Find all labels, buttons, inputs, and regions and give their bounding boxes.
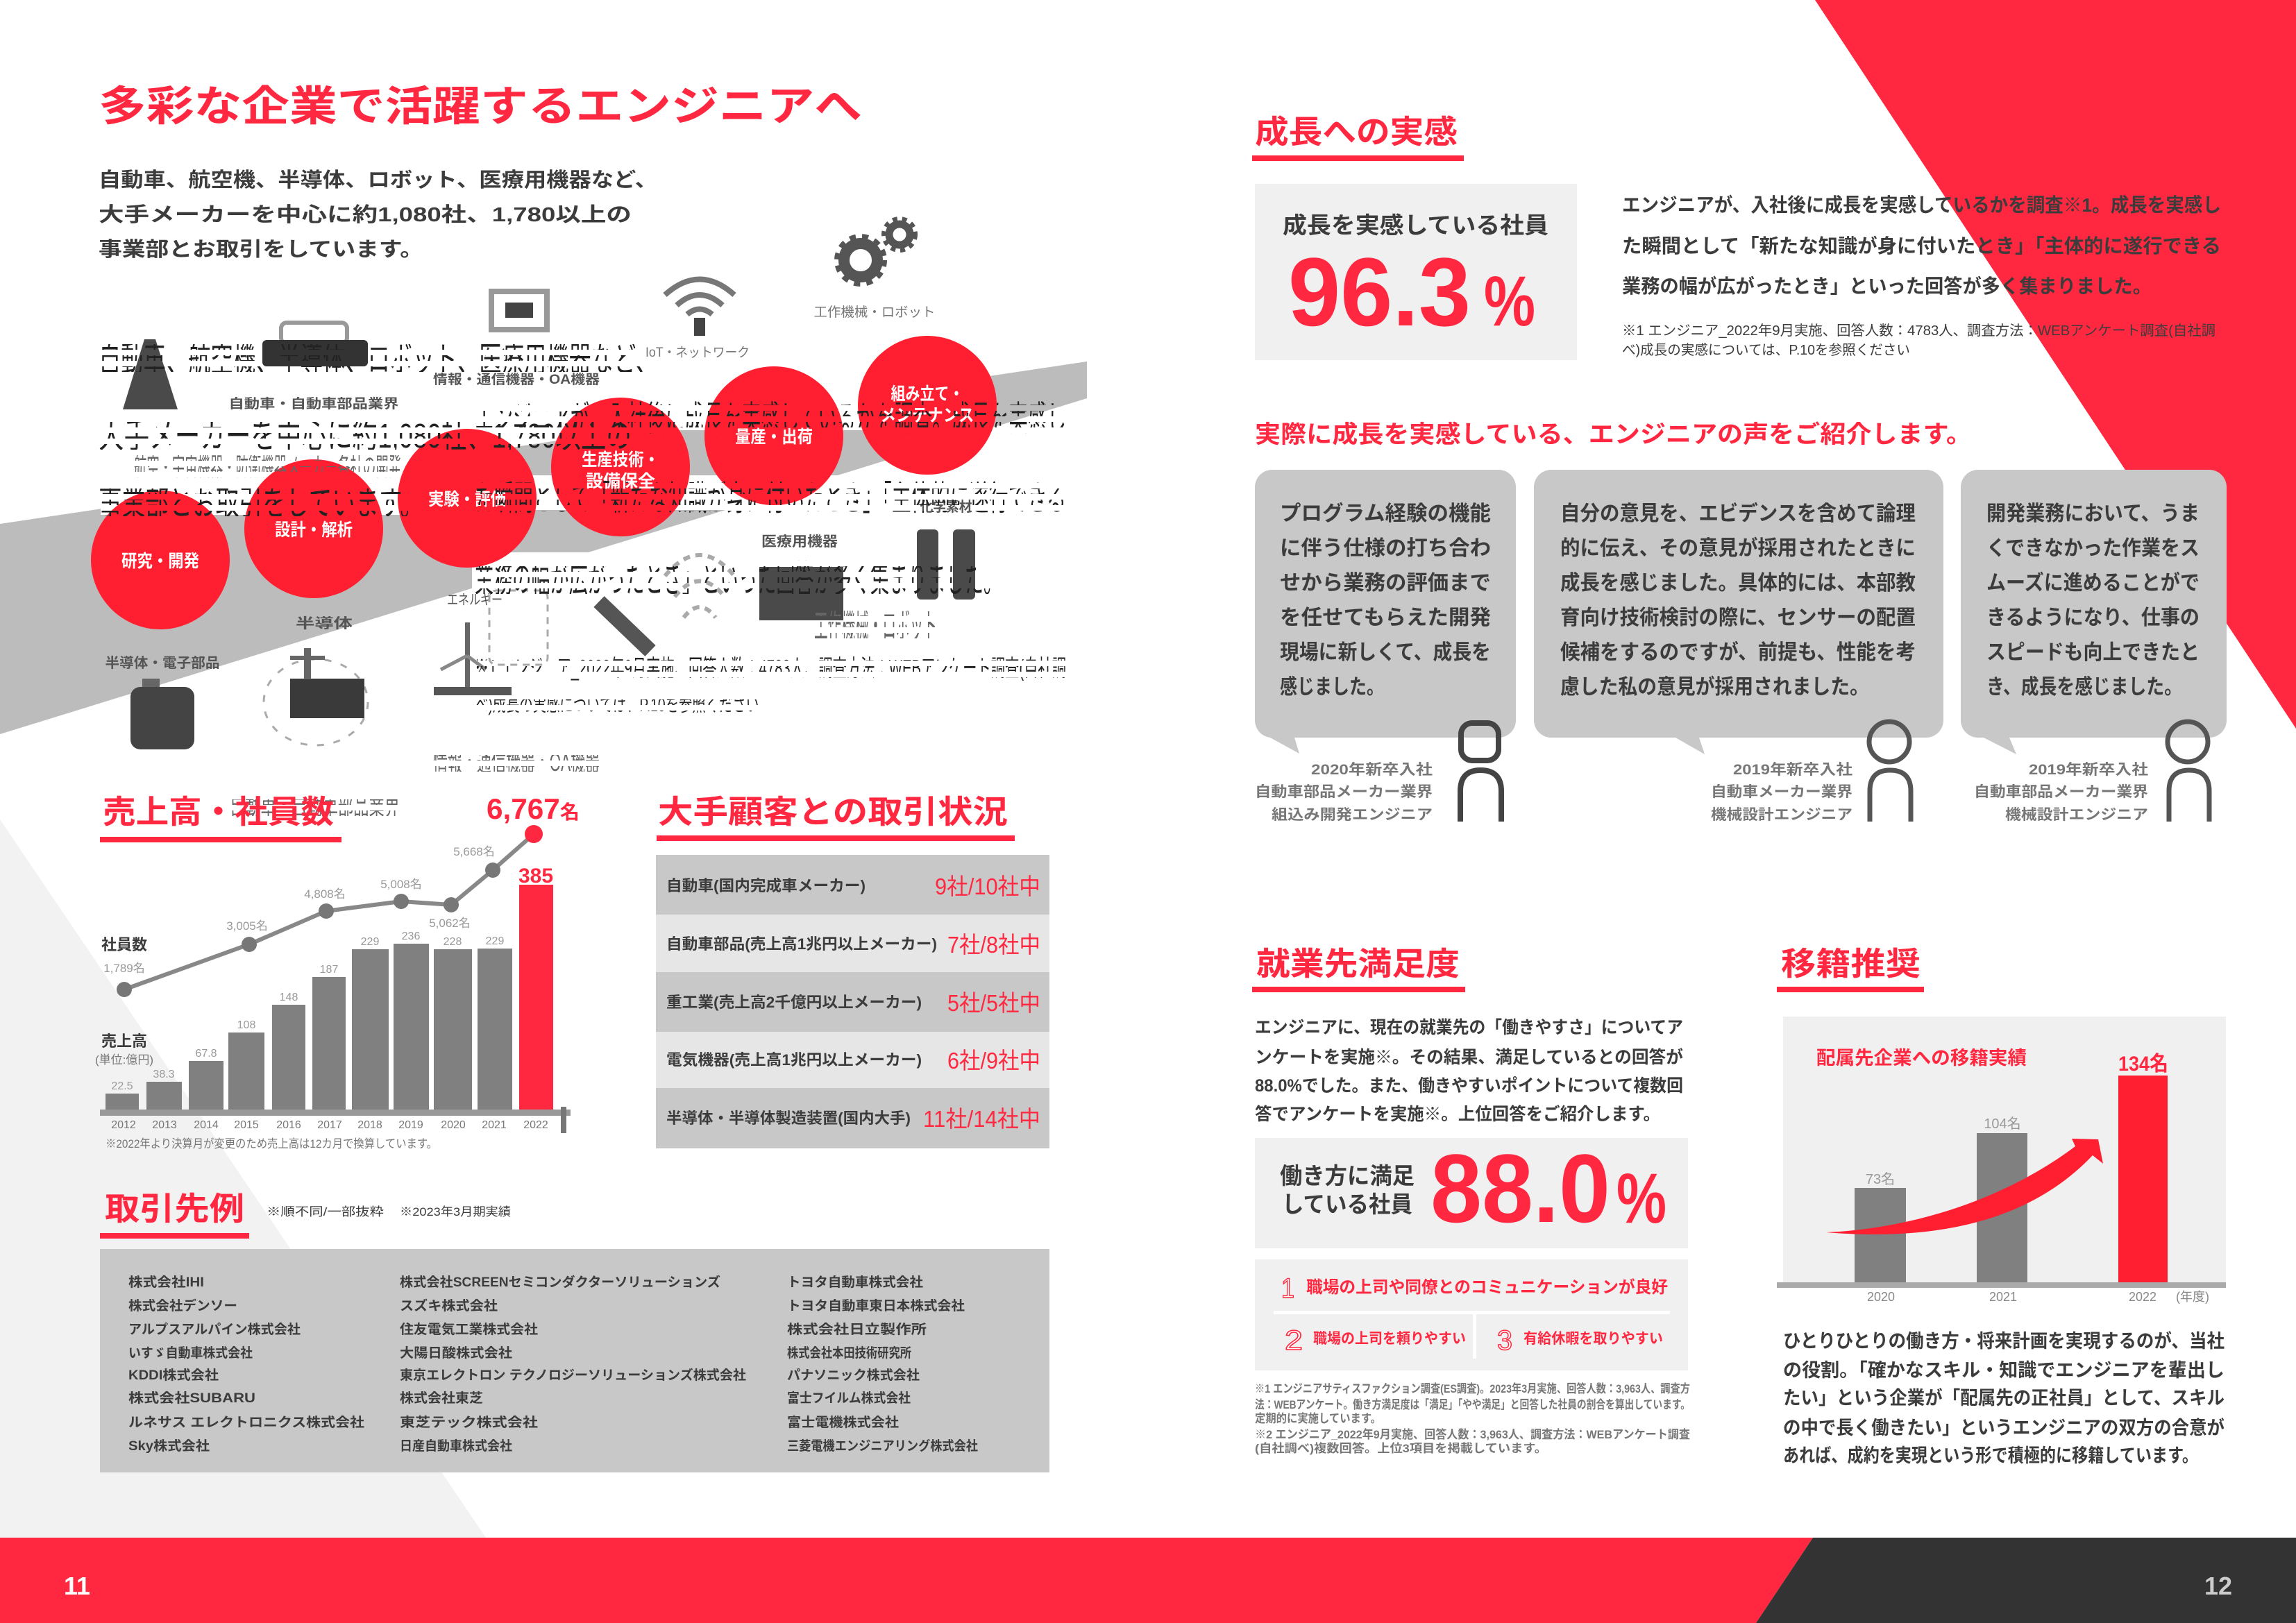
row 4: 電気機器(売上高1兆円以上メーカー)	[666, 1051, 922, 1069]
column 3: トヨタ自動車株式会社	[787, 1275, 923, 1290]
bubble	[1961, 470, 2227, 754]
value: latest employees: 6,767名	[487, 792, 580, 825]
heading: engineer voices: 実際に成長を実感している、エンジニアの声をご紹介します。	[1255, 421, 1972, 448]
step: assembly: メンテナンス	[880, 406, 974, 425]
panel: growth statistic	[1255, 184, 1577, 360]
reason 3: 有給休暇を取りやすい	[1523, 1331, 1663, 1347]
footer: dark band	[1756, 1538, 2296, 1623]
column 3: 三菱電機エンジニアリング株式会社	[787, 1438, 978, 1454]
reason 2: 2	[1285, 1325, 1303, 1356]
ghost overlay text: 自動車・自動車部品業界	[230, 793, 400, 820]
reason 1: 職場の上司や同僚とのコミュニケーションが良好	[1306, 1277, 1668, 1297]
line value labels: 5,668名	[453, 845, 495, 858]
page number 12: 12	[2204, 1572, 2232, 1600]
line value labels	[103, 845, 495, 975]
panel: satisfaction statistic	[1255, 1134, 1688, 1248]
label: machine tools: 工作機械・ロボット	[813, 305, 936, 320]
satisfaction footnotes: 法：WEBアンケート。働き方満足度は「満足」「やや満足」と回答した社員の割合を算出しています。	[1255, 1397, 1690, 1411]
table: major customers	[656, 855, 1049, 1148]
caption: 組込み開発エンジニア	[1272, 807, 1433, 823]
column 1: 株式会社デンソー	[128, 1298, 237, 1314]
row 4: 6社/9社中	[947, 1048, 1040, 1073]
row 5: 半導体・半導体製造装置(国内大手)	[666, 1110, 911, 1127]
voice 1	[1255, 470, 1516, 823]
column 1: KDDI株式会社	[128, 1368, 219, 1383]
line value labels: 4,808名	[304, 887, 346, 901]
ghost overlay text: 航空・宇宙機器・防衛機器メーカー各社の開発	[134, 453, 401, 482]
bar value labels: 108	[237, 1019, 255, 1031]
intro text: 事業部とお取引をしています。	[99, 238, 423, 261]
intro text	[99, 169, 657, 261]
person	[1460, 723, 1501, 822]
bar value labels: 187	[320, 964, 338, 976]
year labels: 2018	[357, 1119, 382, 1131]
label: information devices: 情報・通信機器・OA機器	[433, 372, 600, 387]
year labels: 2016	[276, 1119, 301, 1131]
transfer description: あれば、成約を実現という形で積極的に移籍しています。	[1783, 1445, 2198, 1466]
ghost overlay text: べ)成長の実感については、P.10を参照ください	[475, 695, 759, 716]
bar value labels: 148	[280, 992, 298, 1003]
value: latest sales: 385	[518, 865, 553, 887]
title: 多彩な企業で活躍するエンジニアへ	[99, 83, 862, 130]
axis	[1777, 1282, 2226, 1288]
growth description: 業務の幅が広がったとき」といった回答が多く集まりました。	[1622, 275, 2152, 297]
step: mass production: 量産・出荷	[735, 427, 813, 447]
bar 1	[1855, 1188, 1906, 1282]
client note 2: ※2023年3月期実績	[400, 1205, 511, 1218]
panel: top reasons	[1255, 1259, 1688, 1370]
quote: スピードも向上できたと	[1986, 641, 2200, 664]
label: medical: 医療用機器	[761, 534, 838, 550]
step: production engineering	[551, 398, 690, 536]
label: automobile: 自動車・自動車部品業界	[229, 396, 398, 411]
person	[1869, 722, 1911, 822]
icon: gears	[837, 219, 915, 284]
icon: monitor	[491, 291, 547, 330]
caption	[1974, 762, 2148, 823]
bar value labels: 228	[444, 936, 462, 948]
icon: device block	[130, 679, 194, 749]
column 1: 株式会社IHI	[128, 1275, 204, 1290]
column 1: アルプスアルパイン株式会社	[128, 1322, 301, 1337]
row 4	[656, 1032, 1049, 1088]
heading: sales and employees: 売上高・社員数	[103, 794, 334, 830]
bar value labels: 229	[486, 935, 504, 947]
bar value labels: 67.8	[195, 1048, 217, 1060]
quote: ムーズに進めることがで	[1986, 571, 2200, 595]
reason 2: 職場の上司を頼りやすい	[1313, 1331, 1466, 1347]
reason 1: 1	[1281, 1273, 1294, 1304]
icon: tower	[123, 339, 178, 409]
column 1: Sky株式会社	[128, 1438, 210, 1454]
ghost overlay text: 自動車、航空機、半導体、ロボット、医療用機器など、	[99, 341, 657, 379]
bar: latest sales	[519, 885, 553, 1110]
caption: 2019年新卒入社	[2029, 762, 2148, 778]
heading: sense of growth	[1252, 114, 1464, 161]
growth footnote: ※1 エンジニア_2022年9月実施、回答人数：4783人、調査方法：WEBアンケート調査(自社調	[1622, 323, 2215, 339]
quote: 的に伝え、その意見が採用されたときに	[1560, 536, 1916, 560]
line: employees	[124, 834, 534, 989]
label: chemicals: 化学素材	[920, 499, 972, 515]
heading: transfer recommendation	[1777, 946, 1924, 992]
step: test	[398, 429, 537, 568]
bar value 1: 73名	[1866, 1171, 1895, 1187]
chart note: ※2022年より決算月が変更のため売上高は12カ月で換算しています。	[105, 1137, 437, 1150]
arrow: upward trend	[1826, 1139, 2103, 1234]
label: network: IoT・ネットワーク	[645, 345, 750, 360]
quote: を任せてもらえた開発	[1280, 606, 1491, 629]
page number 11: 11	[64, 1572, 90, 1600]
quote	[1280, 502, 1491, 699]
bars: sales	[105, 944, 512, 1110]
ghost overlay text: 事業部とお取引をしています。	[99, 484, 423, 522]
satisfaction footnotes: ※2 エンジニア_2022年9月実施、回答人数：3,963人、調査方法：WEBアンケート調査	[1255, 1427, 1690, 1441]
icon: robot arm	[599, 602, 650, 651]
year labels: 2017	[317, 1119, 342, 1131]
transfer description: の役割。「確かなスキル・知識でエンジニアを輩出し	[1783, 1360, 2225, 1381]
client note 1: ※順不同/一部抜粋	[267, 1205, 384, 1218]
axis unit	[561, 1107, 566, 1133]
panel: client list	[100, 1249, 1049, 1472]
icon: wifi	[665, 279, 734, 336]
column 2: 株式会社SCREENセミコンダクターソリューションズ	[400, 1274, 720, 1290]
heading: workplace satisfaction	[1252, 946, 1465, 992]
label: employees: 社員数	[101, 936, 147, 953]
heading: client examples	[100, 1191, 249, 1239]
quote: 感じました。	[1280, 676, 1384, 699]
label: sales: 売上高	[101, 1033, 147, 1050]
ghost overlay text: 業務の幅が広がったとき」といった回答が多く集まりました。	[475, 560, 1002, 600]
column 1: ルネサス エレクトロニクス株式会社	[128, 1415, 364, 1430]
chart title: 配属先企業への移籍実績	[1816, 1048, 2027, 1069]
x labels	[1867, 1290, 2209, 1304]
row 3: 重工業(売上高2千億円以上メーカー)	[666, 994, 922, 1011]
row 3	[656, 972, 1049, 1032]
quote: 現場に新しくて、成長を	[1280, 641, 1491, 664]
bar value labels: 236	[402, 931, 420, 942]
year labels: 2020	[441, 1119, 466, 1131]
column 2: 住友電気工業株式会社	[400, 1322, 538, 1337]
ghost overlay text: 情報・通信機器・OA機器	[433, 749, 600, 777]
caption: 2020年新卒入社	[1311, 762, 1433, 778]
label: sales unit: (単位:億円)	[95, 1053, 153, 1067]
step: design	[244, 459, 383, 598]
panel: growth statistic: 成長を実感している社員	[1283, 212, 1548, 238]
bar value labels: 38.3	[153, 1069, 175, 1080]
column 3: 株式会社日立製作所	[787, 1322, 927, 1337]
caption: 機械設計エンジニア	[1711, 807, 1852, 823]
column 2: スズキ株式会社	[400, 1298, 498, 1314]
satisfaction footnotes: ※1 エンジニアサティスファクション調査(ES調査)。2023年3月実施、回答人数：3,963人、調査方	[1255, 1382, 1690, 1395]
reason 2	[1285, 1325, 1466, 1356]
person	[2168, 722, 2209, 822]
bar value 3: 134名	[2118, 1053, 2168, 1076]
column 2: 東芝テック株式会社	[400, 1415, 538, 1430]
heading: transfer recommendation: 移籍推奨	[1781, 946, 1921, 982]
column 3: トヨタ自動車東日本株式会社	[787, 1298, 965, 1314]
satisfaction footnotes	[1255, 1382, 1690, 1455]
footer: red band	[0, 1538, 1813, 1623]
panel: satisfaction statistic: している社員	[1282, 1191, 1412, 1217]
heading: client examples: 取引先例	[105, 1191, 244, 1227]
step: test: 実験・評価	[428, 490, 506, 509]
x labels: (年度)	[2176, 1290, 2209, 1304]
quote: き、成長を感じました。	[1986, 676, 2182, 699]
bar value labels: 22.5	[111, 1080, 133, 1092]
transfer description	[1783, 1330, 2225, 1466]
line value labels: 1,789名	[103, 962, 145, 975]
caption: 自動車部品メーカー業界	[1974, 784, 2148, 800]
panel: growth statistic: %	[1484, 262, 1535, 341]
column 2	[400, 1274, 746, 1454]
row 1: 自動車(国内完成車メーカー)	[666, 877, 866, 894]
ghost overlay text: た瞬間として「新たな知識が身に付いたとき」「主体的に遂行できる	[475, 479, 1066, 518]
growth description: エンジニアが、入社後に成長を実感しているかを調査※1。成長を実感し	[1622, 194, 2221, 216]
heading: major customers: 大手顧客との取引状況	[658, 794, 1008, 830]
column 2: 大陽日酸株式会社	[400, 1345, 512, 1361]
ghost overlay text: 工作機械・ロボット	[814, 608, 937, 647]
step: production engineering: 生産技術・	[582, 450, 659, 470]
x labels: 2022	[2129, 1290, 2156, 1304]
ghost overlay text: ※1 エンジニア_2022年9月実施、回答人数：4783人、調査方法：WEBアンケート調査(自社調	[475, 656, 1066, 681]
transfer description: ひとりひとりの働き方・将来計画を実現するのが、当社	[1783, 1330, 2225, 1352]
quote: プログラム経験の機能	[1280, 502, 1491, 525]
chart: sales bars and employee line	[95, 792, 580, 1150]
ghost overlay text	[99, 341, 1066, 820]
step: assembly	[858, 336, 997, 475]
panel: growth statistic: 96.3	[1288, 237, 1471, 346]
process circles	[91, 336, 997, 629]
satisfaction footnotes: (自社調べ)複数回答。上位3項目を掲載しています。	[1255, 1441, 1547, 1455]
column 2: 日産自動車株式会社	[400, 1438, 512, 1454]
column 2: 東京エレクトロン テクノロジーソリューションズ株式会社	[400, 1367, 746, 1383]
background: red corner	[1815, 0, 2296, 729]
satisfaction description: エンジニアに、現在の就業先の「働きやすさ」についてア	[1255, 1018, 1683, 1037]
row 1: 9社/10社中	[935, 874, 1040, 899]
intro text: 自動車、航空機、半導体、ロボット、医療用機器など、	[99, 169, 657, 192]
quote: 開発業務において、うま	[1986, 502, 2200, 525]
latest marker	[525, 825, 543, 843]
bubble	[1255, 470, 1516, 754]
background: light grey corner	[0, 819, 486, 1538]
bar value labels: 229	[361, 936, 379, 948]
background: grey process band	[0, 362, 1087, 734]
caption: 自動車部品メーカー業界	[1255, 784, 1433, 800]
quote: 慮した私の意見が採用されました。	[1560, 675, 1869, 699]
year labels: 2022	[523, 1119, 548, 1131]
label: semiconductor: 半導体	[296, 615, 353, 631]
step: mass production	[704, 366, 843, 505]
step: research: 研究・開発	[121, 552, 199, 571]
row 2: 自動車部品(売上高1兆円以上メーカー)	[666, 935, 937, 953]
column 1	[128, 1275, 364, 1454]
quote	[1560, 502, 1916, 699]
line value labels: 5,008名	[380, 878, 422, 891]
label: energy: エネルギー	[447, 592, 503, 608]
transfer description: の中で長く働きたい」というエンジニアの双方の合意が	[1783, 1417, 2225, 1438]
year labels: 2019	[398, 1119, 423, 1131]
reason 3	[1497, 1325, 1663, 1356]
satisfaction description: 88.0%でした。また、働きやすいポイントについて複数回	[1255, 1076, 1683, 1096]
process icons and labels	[105, 219, 975, 749]
caption: 2019年新卒入社	[1733, 762, 1852, 778]
bar 2	[1977, 1133, 2027, 1282]
heading: sense of growth: 成長への実感	[1255, 114, 1458, 150]
reason 3: 3	[1497, 1325, 1512, 1356]
growth description: た瞬間として「新たな知識が身に付いたとき」「主体的に遂行できる	[1622, 235, 2221, 257]
row 2	[656, 915, 1049, 972]
column 3: 富士電機株式会社	[787, 1415, 899, 1430]
panel: satisfaction statistic: %	[1617, 1159, 1666, 1238]
satisfaction description	[1255, 1018, 1683, 1124]
heading: workplace satisfaction: 就業先満足度	[1256, 946, 1460, 982]
row 3: 5社/5社中	[947, 990, 1040, 1016]
year labels: 2014	[194, 1119, 219, 1131]
x labels: 2020	[1867, 1290, 1895, 1304]
ghost overlay text: エンジニアが、入社後に成長を実感しているかを調査。成長を実感し	[475, 400, 1066, 438]
caption: 機械設計エンジニア	[2005, 807, 2148, 823]
satisfaction description: 答でアンケートを実施※。上位回答をご紹介します。	[1255, 1104, 1660, 1124]
bar value 2: 104名	[1984, 1116, 2021, 1132]
panel: satisfaction statistic: 88.0	[1430, 1134, 1610, 1243]
line value labels: 5,062名	[429, 917, 471, 930]
step: design: 設計・解析	[275, 520, 353, 540]
row 5: 11社/14社中	[923, 1106, 1040, 1132]
quote: 候補をするのですが、前提も、性能を考	[1560, 640, 1916, 664]
panel: satisfaction statistic: 働き方に満足	[1280, 1163, 1415, 1189]
heading: sales and employees	[100, 794, 341, 842]
row 2: 7社/8社中	[947, 932, 1040, 958]
transfer description: たい」という企業が「配属先の正社員」として、スキル	[1783, 1387, 2225, 1409]
bubble	[1534, 470, 1943, 754]
quote: 育向け技術検討の際に、センサーの配置	[1560, 606, 1916, 629]
year labels	[111, 1119, 548, 1131]
icon: plant	[264, 648, 368, 745]
x labels: 2021	[1989, 1290, 2017, 1304]
intro text: 大手メーカーを中心に約1,080社、1,780以上の	[99, 203, 632, 226]
quote	[1986, 502, 2200, 699]
reason 1	[1281, 1273, 1668, 1304]
quote: きるようになり、仕事の	[1986, 606, 2200, 629]
growth description	[1622, 194, 2221, 297]
icon: wind turbine	[434, 622, 512, 695]
column 2: 株式会社東芝	[400, 1391, 483, 1406]
step: research	[91, 491, 230, 629]
year labels: 2015	[234, 1119, 259, 1131]
voice 2	[1534, 470, 1943, 823]
icon: bottles	[917, 529, 975, 600]
icon: dark equipment	[759, 567, 843, 620]
icon: signal arcs	[665, 555, 734, 618]
column 1: 株式会社SUBARU	[128, 1391, 255, 1406]
column 3: 富士フイルム株式会社	[787, 1391, 911, 1406]
year labels: 2013	[152, 1119, 177, 1131]
column 3: パナソニック株式会社	[787, 1368, 920, 1383]
row 5	[656, 1088, 1049, 1148]
axis	[100, 1110, 571, 1116]
year labels: 2012	[111, 1119, 136, 1131]
bar value labels	[111, 931, 504, 1092]
voice 3	[1961, 470, 2227, 823]
growth footnote: べ)成長の実感については、P.10を参照ください	[1622, 342, 1910, 358]
growth footnote	[1622, 323, 2215, 358]
satisfaction description: ンケートを実施※。その結果、満足しているとの回答が	[1255, 1047, 1683, 1067]
quote: に伴う仕様の打ち合わ	[1280, 537, 1491, 560]
caption	[1255, 762, 1433, 823]
icon: car	[262, 323, 368, 366]
line value labels: 3,005名	[226, 919, 268, 933]
step: assembly: 組み立て・	[891, 384, 963, 404]
step: production engineering: 設備保全	[586, 472, 655, 491]
label: semiconductor devices: 半導体・電子部品	[105, 654, 219, 671]
quote: 自分の意見を、エビデンスを含めて論理	[1560, 502, 1916, 525]
heading: major customers	[657, 794, 1015, 841]
caption	[1711, 762, 1852, 823]
column 3: 株式会社本田技術研究所	[787, 1345, 911, 1361]
column 1: いすゞ自動車株式会社	[128, 1345, 253, 1361]
row 1	[656, 855, 1049, 915]
caption: 自動車メーカー業界	[1711, 784, 1852, 800]
line markers	[117, 863, 500, 997]
icon: handset outline	[489, 590, 548, 665]
quote: せから業務の評価まで	[1280, 572, 1491, 595]
quote: くできなかった作業をス	[1986, 537, 2200, 560]
satisfaction footnotes: 定期的に実施しています。	[1255, 1412, 1381, 1425]
column 3	[787, 1275, 978, 1454]
year labels: 2021	[482, 1119, 507, 1131]
panel: transfer chart	[1777, 1017, 2226, 1304]
quote: 成長を感じました。具体的には、本部教	[1560, 572, 1916, 595]
background: white patches over band	[101, 333, 1069, 592]
bar 3	[2118, 1076, 2168, 1282]
ghost overlay text: 大手メーカーを中心に約1,080社、1,780以上の	[99, 417, 632, 455]
